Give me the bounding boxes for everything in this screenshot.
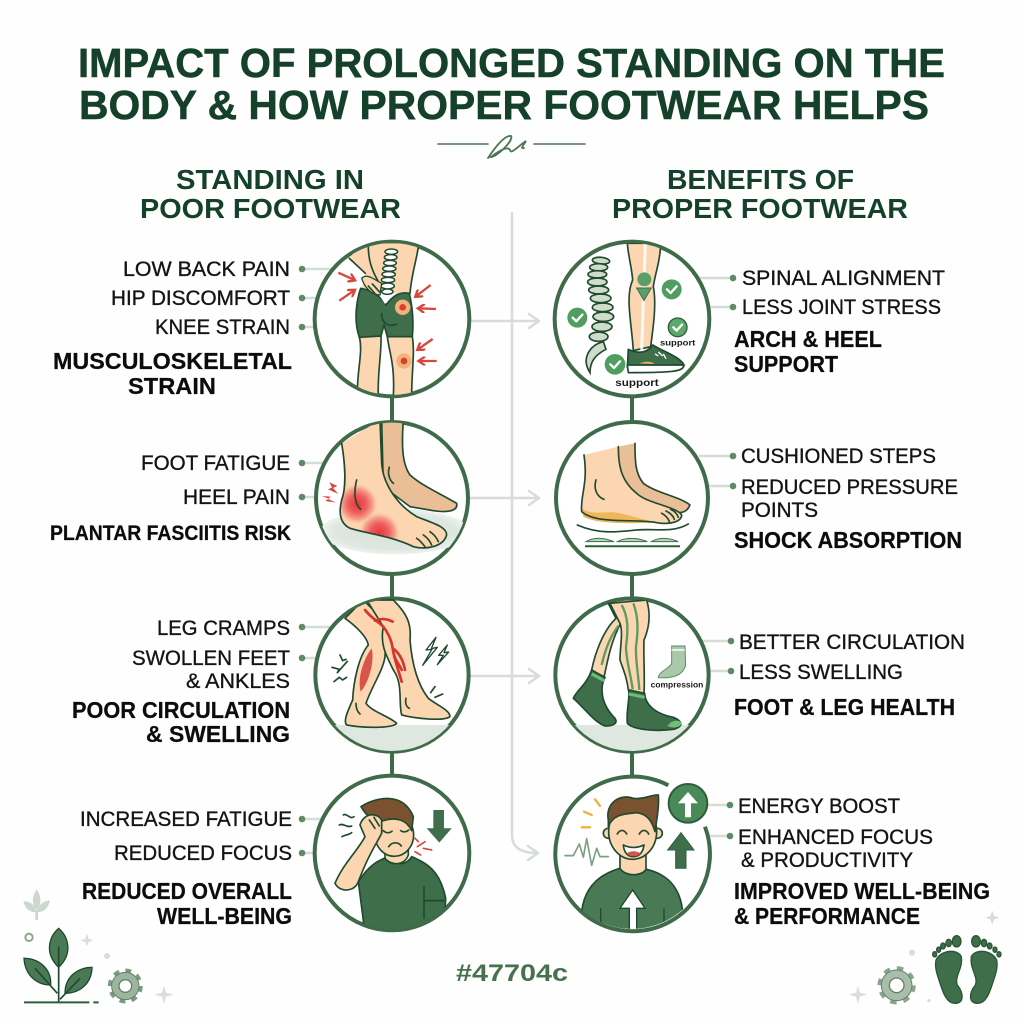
panel: musculoskeletal strain text [53,258,292,399]
panel: improved well-being text [734,795,990,929]
icon: plant bottom left [23,889,110,1002]
panel: arch and heel support text [734,267,945,377]
heading: standing in poor footwear [140,164,401,224]
panel: musculoskeletal strain text: LOW BACK PAIN [123,258,290,281]
panel: foot and leg health text: BETTER CIRCULATION [739,631,965,654]
panel: shock absorption text: POINTS [741,499,818,522]
panel: reduced well-being text: REDUCED OVERALL [82,878,292,904]
panel: plantar fasciitis text: FOOT FATIGUE [141,452,290,475]
panel: arch and heel support text: SUPPORT [734,351,838,377]
panel: plantar fasciitis text [50,452,291,545]
panel: poor circulation text: LEG CRAMPS [157,617,290,640]
icon: compression socks: compression [651,680,703,690]
panel: shock absorption text: REDUCED PRESSURE [741,476,958,499]
icon: hips and legs with strain arrows [315,242,469,397]
panel: foot and leg health text: LESS SWELLING [739,661,903,684]
icon: legs with veins and cramps [313,598,473,758]
icon: spine, leg and supportive shoe [555,242,709,396]
heading: standing in poor footwear: STANDING IN [176,164,364,195]
icon: gear left [110,971,173,1004]
label connectors left [299,266,340,856]
panel: arch and heel support text: LESS JOINT STRESS [742,296,941,319]
panel: arch and heel support text: SPINAL ALIGNMENT [742,267,945,290]
panel: improved well-being text: ENERGY BOOST [738,795,900,818]
panel: arch and heel support text: ARCH & HEEL [734,326,882,352]
title: IMPACT OF PROLONGED STANDING ON THE [78,40,945,86]
icon: cushioned feet [556,422,708,574]
panel: improved well-being text: & PRODUCTIVITY [741,849,913,872]
panel: reduced well-being text [80,808,292,929]
panel: musculoskeletal strain text: HIP DISCOMFORT [111,287,290,310]
panel: foot and leg health text [734,631,965,720]
central connector with arrows [470,213,539,860]
icon: happy energized man [555,777,710,933]
icon: painful feet [316,420,470,574]
panel: shock absorption text: SHOCK ABSORPTION [734,527,962,553]
panel: musculoskeletal strain text: KNEE STRAIN [155,316,290,339]
icon: compression socks [553,598,713,758]
icon: gear right [849,911,999,1004]
panel: musculoskeletal strain text: STRAIN [128,373,216,399]
panel: poor circulation text [72,617,290,747]
panel: poor circulation text: & SWELLING [146,721,290,747]
panel: plantar fasciitis text: HEEL PAIN [183,486,290,509]
panel: foot and leg health text: FOOT & LEG HEALTH [734,694,955,720]
panel: reduced well-being text: WELL-BEING [157,903,292,929]
panel: improved well-being text: ENHANCED FOCUS [738,826,933,849]
panel: shock absorption text: CUSHIONED STEPS [741,445,936,468]
title: BODY & HOW PROPER FOOTWEAR HELPS [79,82,929,128]
panel: musculoskeletal strain text: MUSCULOSKELETAL [53,348,292,374]
panel: reduced well-being text: INCREASED FATIGUE [80,808,292,831]
panel: shock absorption text [734,445,962,553]
panel: poor circulation text: & ANKLES [186,670,290,693]
hex code: #47704c [456,960,568,987]
heading: benefits of proper footwear [612,164,908,224]
heading: benefits of proper footwear: PROPER FOOTWEAR [612,193,908,224]
label connectors right [700,275,736,839]
title flourish [438,136,585,158]
panel: reduced well-being text: REDUCED FOCUS [114,842,292,865]
panel: poor circulation text: POOR CIRCULATION [72,697,290,723]
panel: poor circulation text: SWOLLEN FEET [132,647,290,670]
panel: improved well-being text: IMPROVED WELL-BEING [734,878,990,904]
icon: footprints [933,936,1001,1003]
icon: spine, leg and supportive shoe: support [660,338,696,348]
title [78,40,945,128]
icon: tired man holding head [315,776,469,933]
panel: plantar fasciitis text: PLANTAR FASCIITIS RISK [50,522,291,545]
vertical links between circles [392,393,632,778]
panel: improved well-being text: & PERFORMANCE [734,903,920,929]
heading: standing in poor footwear: POOR FOOTWEAR [140,193,401,224]
icon: spine, leg and supportive shoe: support [615,378,659,389]
heading: benefits of proper footwear: BENEFITS OF [667,164,854,195]
